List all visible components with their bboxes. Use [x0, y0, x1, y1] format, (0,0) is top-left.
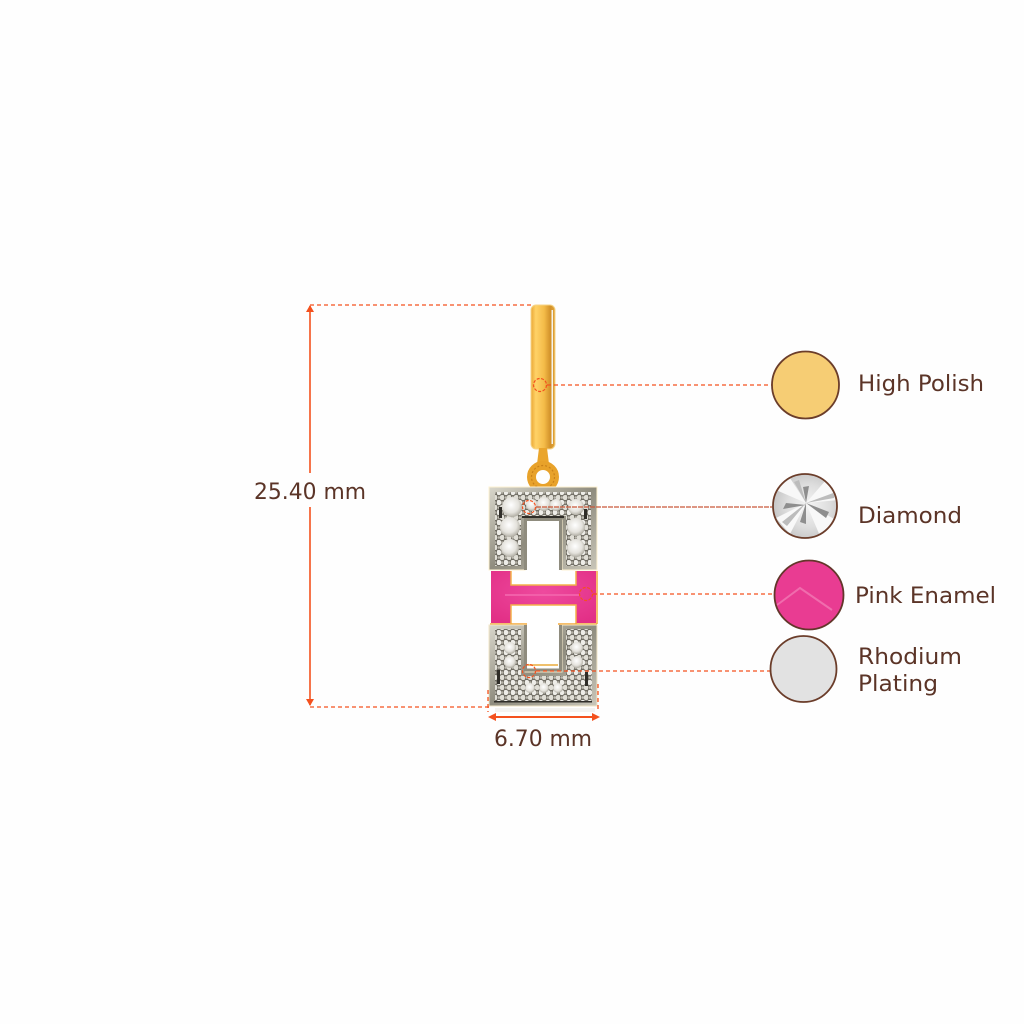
gold bail bar [531, 305, 555, 464]
width label: 6.70 mm [494, 727, 592, 752]
label: pink enamel: Pink Enamel [855, 584, 996, 609]
callout: rhodium plating [522, 636, 962, 702]
pink enamel bar [490, 571, 597, 624]
label: rhodium plating [858, 645, 962, 697]
swatch: high polish [772, 352, 839, 418]
height dimension [254, 305, 531, 707]
gold jump ring [532, 466, 554, 488]
callout: diamond [522, 474, 962, 538]
callout: high polish [534, 352, 984, 418]
dark setting slots [499, 507, 587, 519]
pendant shadow [495, 708, 595, 712]
swatch: diamond [773, 474, 838, 538]
callout: pink enamel [580, 560, 996, 630]
label: diamond: Diamond [858, 504, 962, 529]
swatch: pink enamel [774, 560, 844, 630]
pendant illustration [489, 305, 597, 712]
width dimension [488, 684, 600, 752]
bottom diamond frame [489, 623, 597, 706]
label: rhodium plating: Rhodium [858, 645, 962, 670]
top diamond frame [489, 487, 597, 571]
label: high polish: High Polish [858, 372, 984, 397]
label: rhodium plating: Plating [858, 672, 938, 697]
height label: 25.40 mm [254, 480, 366, 505]
swatch: rhodium plating [770, 636, 836, 702]
